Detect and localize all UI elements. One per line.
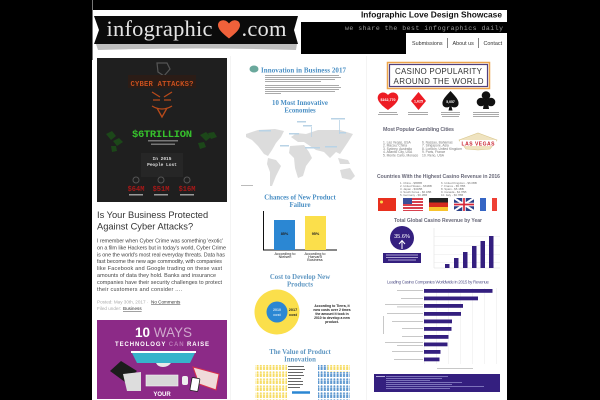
icon: heart stat: $162,770 <box>380 98 396 102</box>
panel: cyber attacks infographic thumbnail: CYBER ATTACKS? <box>130 81 194 89</box>
icon: mouse <box>182 376 188 385</box>
pictogram: people yellow <box>255 365 287 400</box>
icon: money right <box>198 132 217 149</box>
donut comparison: development cost: now costs over 2 times <box>313 308 351 312</box>
donut comparison: development cost: cost <box>273 313 281 317</box>
revenue countries list: 9. Canada - $4.7BB <box>441 190 466 194</box>
post excerpt: their customers and consider .... <box>97 287 182 293</box>
heading <box>270 274 330 288</box>
post excerpt: I remember when Cyber Crime was something 'exotic' <box>97 238 223 244</box>
donut comparison: development cost: cost <box>289 313 298 317</box>
bar chart: product failure: According to <box>274 252 296 256</box>
revenue countries list: 6. United Kingdom - $6.0BB <box>441 181 477 185</box>
bar chart: product failure: 85% <box>281 232 289 236</box>
header black band with tagline: we share the best infographics daily <box>345 25 503 32</box>
heading <box>269 349 332 364</box>
icon: heart stat <box>378 92 398 110</box>
gambling cities heading: Most Popular Gambling Cities <box>383 127 454 133</box>
revenue countries list: 10. Italy - $3.7BB <box>441 193 463 197</box>
revenue countries list: 7. France - $5.7BB <box>441 184 465 188</box>
post meta <box>97 300 181 311</box>
post meta: Filed under: <box>97 306 121 311</box>
header logo banner: infographic <box>106 16 212 41</box>
casino title box: CASINO POPULARITY <box>395 67 483 76</box>
bar chart: product failure: Nielsen <box>279 255 291 259</box>
icon: flag Germany <box>429 198 448 211</box>
growth callout <box>383 253 421 263</box>
icon: anonymous mask <box>152 92 172 117</box>
panel: cyber attacks infographic thumbnail: $51M <box>153 186 169 194</box>
panel: cyber attacks infographic thumbnail: $6TRILLION <box>132 129 192 141</box>
panel: cyber attacks infographic thumbnail: In 2015 <box>153 156 172 162</box>
panel: technology infographic thumbnail: YOUR <box>153 392 171 398</box>
heading: Innovation <box>284 356 316 364</box>
panel: technology infographic thumbnail: 10 WAYS <box>135 325 192 340</box>
bar chart: product failure: Business <box>307 258 323 262</box>
bar chart: product failure <box>264 211 337 262</box>
stat captions <box>378 112 499 117</box>
heading: Failure <box>289 202 311 209</box>
casino title box: AROUND THE WORLD <box>394 77 484 86</box>
leading companies heading: Leading Casino Companies Worldwide in 2015 by Revenue <box>387 280 490 284</box>
heading: Innovation in Business 2017 <box>261 66 346 74</box>
donut comparison: development cost: 2010 <box>273 308 281 312</box>
post excerpt: companies have their security challenges to protect <box>97 280 222 286</box>
heading: Products <box>287 282 313 288</box>
icon: Las Vegas sign <box>459 133 497 150</box>
icon: keyboard <box>146 375 178 386</box>
arrow: double headed <box>292 391 310 394</box>
donut comparison: development cost: 2010 to develop a new <box>314 316 350 320</box>
post excerpt: fast become the new age commodity, with companies <box>97 259 222 265</box>
header logo banner: .com <box>242 16 287 41</box>
revenue countries list: 4. South Korea - $6.1BB <box>400 190 431 194</box>
icon: notebook <box>110 361 137 382</box>
gambling cities list: 5. Monte Carlo, Monaco <box>383 153 418 157</box>
icon: club stat <box>477 91 495 109</box>
post excerpt <box>97 238 226 293</box>
icon: money left <box>106 131 123 152</box>
icon: Las Vegas sign: LAS VEGAS <box>462 142 495 148</box>
navigation menu: Contact <box>484 41 503 47</box>
icon: flag China <box>378 198 396 211</box>
heading: Chances of New Product <box>264 194 336 202</box>
panel: cyber attacks infographic thumbnail: People Lost <box>147 162 177 168</box>
gambling cities list: 9. Paris, France <box>422 150 445 154</box>
gambling cities list: 4. Atlantic City, USA <box>383 150 413 154</box>
growth stat circle: 35.6% <box>394 234 410 240</box>
navigation menu: Submissions <box>412 41 443 47</box>
revenue countries list: 5. Germany - $6.2BB <box>400 193 427 197</box>
gambling cities list: 8. London, United Kingdom <box>422 147 462 151</box>
bar chart: product failure: Harvard <box>308 255 322 259</box>
gambling cities list <box>383 140 462 157</box>
heading <box>272 100 328 114</box>
gambling cities list: 10. Reno, USA <box>422 153 445 157</box>
gambling cities list: 1. Las Vegas, USA <box>383 140 411 144</box>
panel: cyber attacks infographic thumbnail: $16M <box>179 186 195 194</box>
bar chart: product failure: According to <box>304 252 326 256</box>
site title: Infographic Love Design Showcase <box>361 10 502 20</box>
icon: shield logo <box>157 63 170 76</box>
heading: Economies <box>284 108 316 114</box>
icon: diamond stat: 1,625 <box>414 100 423 104</box>
pictogram: people blue and yellow <box>318 365 350 400</box>
post heading <box>97 210 208 232</box>
donut comparison: development cost <box>254 290 351 334</box>
post meta: Business <box>123 306 142 311</box>
navigation menu: About us <box>452 41 474 47</box>
post meta: Posted: May 30th, 2017 · <box>97 300 148 304</box>
icon: spade stat: 5,057 <box>446 100 455 104</box>
heading: Cost to Develop New <box>270 274 330 281</box>
header logo banner <box>94 16 298 50</box>
icon: phone <box>190 377 200 392</box>
casino title box <box>388 62 490 88</box>
header black band with tagline <box>301 22 507 54</box>
revenue countries list <box>400 181 477 197</box>
heading: 10 Most Innovative <box>272 100 328 107</box>
revenue countries list: 8. Spain - $5.1BB <box>441 187 464 191</box>
total revenue heading: Total Global Casino Revenue by Year <box>394 218 482 224</box>
post excerpt: on a film like Hackers but in today's world, Cyber Crime <box>97 246 226 252</box>
gambling cities list: 6. Nassau, Bahamas <box>422 140 453 144</box>
heading <box>264 194 336 209</box>
heading: The Value of Product <box>269 349 332 356</box>
icon: desktop monitor <box>131 351 196 363</box>
bar chart: leading companies <box>383 288 496 369</box>
icon: tablet <box>193 367 219 390</box>
revenue countries heading: Countries With the Highest Casino Revenue in 2016 <box>377 174 500 180</box>
post excerpt: amounts of data they hold. Banks and insurance <box>97 273 216 279</box>
donut comparison: development cost: product. <box>325 320 339 324</box>
panel: technology infographic thumbnail: TECHNOLOGY CAN RAISE <box>115 342 209 348</box>
icon: flag France <box>480 198 497 211</box>
panel: casino popularity infographic <box>374 62 500 392</box>
gambling cities list: 7. Singapore, Asia <box>422 144 449 148</box>
donut comparison: development cost: the amount it took in <box>315 312 349 316</box>
post excerpt: like Facebook and Google trading on these vast <box>97 266 222 272</box>
icon: diamond stat <box>411 92 426 110</box>
gambling cities list: 3. Sydney, Australia <box>383 147 412 151</box>
world map <box>246 129 355 186</box>
icon: heart <box>218 20 240 38</box>
revenue countries list: 2. United States - $63BB <box>400 184 432 188</box>
growth stat circle <box>390 226 414 250</box>
bar chart: revenue by year <box>434 228 500 268</box>
pictogram callout text <box>288 366 305 388</box>
post heading: Against Cyber Attacks? <box>97 222 193 232</box>
panel: cyber attacks infographic thumbnail <box>97 58 227 202</box>
icon: flag USA <box>403 198 423 211</box>
icon: brain <box>250 66 258 72</box>
donut comparison: development cost: 2017 <box>289 308 297 312</box>
bar chart: product failure: 95% <box>312 232 320 236</box>
panel: technology infographic thumbnail <box>97 320 227 399</box>
icon: flag UK <box>454 198 474 211</box>
post excerpt: is one the world's most real everyday threats. Data has <box>97 252 225 258</box>
panel: innovation in business infographic <box>241 66 355 400</box>
post heading: Is Your Business Protected <box>97 210 208 220</box>
revenue countries list: 3. Japan - $31BB <box>400 187 422 191</box>
panel: cyber attacks infographic thumbnail: $64M <box>128 186 144 194</box>
gambling cities list: 2. Macau, China <box>383 144 407 148</box>
donut comparison: development cost: According to Tierra, it <box>314 304 350 308</box>
icon: spade stat <box>442 91 459 110</box>
sources box <box>374 374 500 392</box>
navigation menu <box>412 38 503 48</box>
revenue countries list: 1. China - $65BB <box>400 181 422 185</box>
post meta: No Comments <box>151 300 181 304</box>
